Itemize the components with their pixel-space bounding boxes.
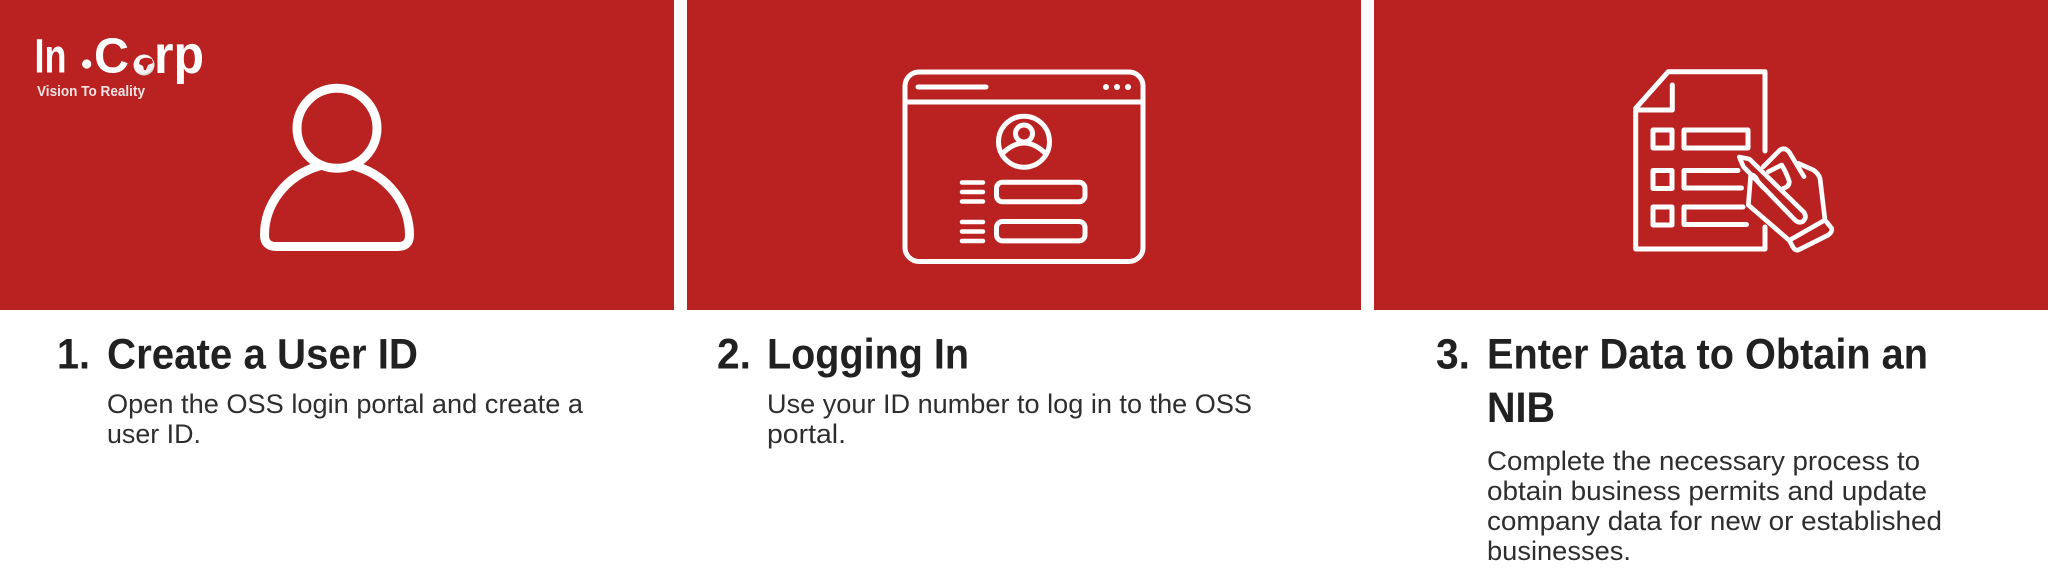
- step 3 description: company data for new or established: [1487, 506, 1942, 536]
- step 3 heading: Enter Data to Obtain an: [1487, 330, 1928, 378]
- panel: step 3 enter data: [1374, 0, 2048, 566]
- step 2 description: Use your ID number to log in to the OSS: [767, 389, 1252, 419]
- logo globe: [132, 54, 156, 76]
- logo tagline: Vision To Reality: [37, 84, 145, 100]
- logo: InCorp: [34, 25, 204, 100]
- step 3 number: 3.: [1436, 330, 1470, 378]
- step 3 description: Complete the necessary process to: [1487, 446, 1920, 476]
- step 2 description: portal.: [767, 419, 846, 449]
- step 2 heading: Logging In: [767, 330, 969, 378]
- step 3 heading: NIB: [1487, 384, 1555, 432]
- icon: form document and writing hand: [1636, 72, 1832, 250]
- red banner 1: [0, 0, 674, 310]
- panel: step 1 create a user ID: [0, 0, 674, 449]
- panel: step 2 logging in: [687, 0, 1361, 449]
- step 3 description: obtain business permits and update: [1487, 476, 1927, 506]
- step 2 number: 2.: [717, 330, 751, 378]
- logo wordmark: C: [94, 30, 129, 84]
- logo wordmark: In: [34, 30, 66, 84]
- step 1 number: 1.: [57, 330, 90, 378]
- document outline: [1636, 72, 1765, 249]
- step 1 description: user ID.: [107, 419, 201, 449]
- step 3 heading: [1487, 330, 1928, 432]
- step 3 description: businesses.: [1487, 536, 1631, 566]
- step 2 description: [767, 389, 1252, 449]
- step 1 description: [107, 389, 583, 449]
- red banner 2: [687, 0, 1361, 310]
- icon: browser login window: [905, 72, 1143, 262]
- red banner 3: [1374, 0, 2048, 310]
- step 3 description: [1487, 446, 1942, 566]
- step 1 description: Open the OSS login portal and create a: [107, 389, 583, 419]
- step 1 heading: Create a User ID: [107, 330, 418, 378]
- logo wordmark: [34, 25, 204, 85]
- logo wordmark: rp: [154, 25, 204, 85]
- icon: person: [264, 88, 410, 246]
- writing hand: [1739, 149, 1832, 250]
